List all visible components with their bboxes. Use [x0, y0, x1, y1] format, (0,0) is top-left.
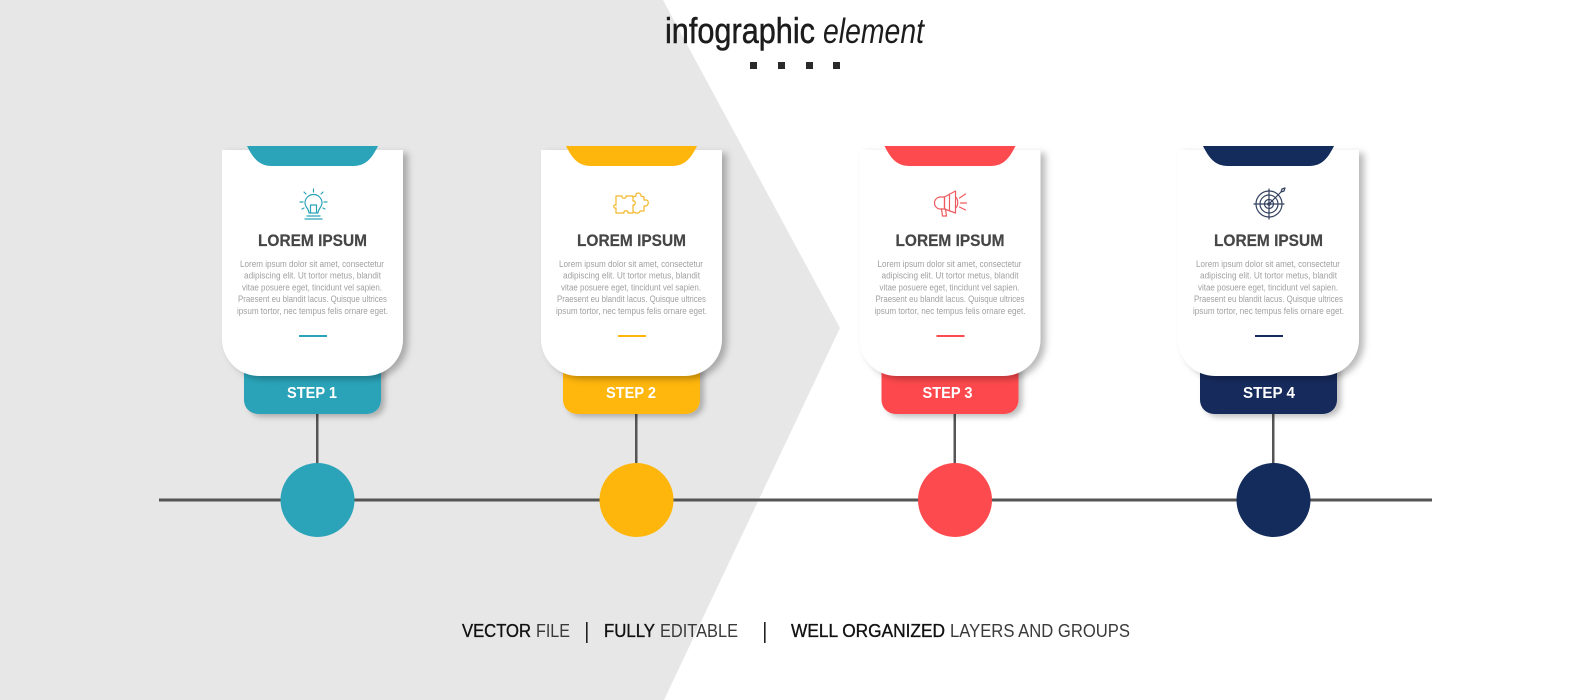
- heading 1: LOREM IPSUM: [258, 232, 367, 250]
- step 3 unit: [860, 146, 1040, 537]
- body text 4: [1193, 259, 1344, 316]
- body text 1: [237, 259, 388, 316]
- timeline node 3: [918, 463, 992, 537]
- connector 1: [316, 410, 318, 464]
- body text 1: adipiscing elit. Ut tortor metus, blandit: [244, 270, 381, 280]
- heading 4: LOREM IPSUM: [1214, 232, 1323, 250]
- card 3 top tab: [884, 146, 1016, 166]
- body text 4: vitae posuere eget, tincidunt vel sapien.: [1198, 282, 1338, 292]
- card 1 top tab: [247, 146, 378, 166]
- heading 3: LOREM IPSUM: [896, 232, 1004, 250]
- footer tagline: EDITABLE: [660, 621, 738, 641]
- card 4: [1178, 150, 1359, 376]
- step 4 unit: [1178, 146, 1359, 537]
- body text 3: ipsum tortor, nec tempus felis ornare eget.: [874, 306, 1026, 316]
- connector 2: [635, 410, 638, 464]
- footer tagline: FULLY: [604, 621, 655, 641]
- body text 3: Praesent eu blandit lacus. Quisque ultrices: [876, 294, 1025, 304]
- accent dash 2: [618, 335, 646, 337]
- body text 3: [874, 259, 1026, 316]
- timeline line: [159, 498, 1432, 502]
- step 1 label tab: [244, 365, 381, 414]
- heading 2: LOREM IPSUM: [577, 232, 686, 250]
- connector 4: [1272, 410, 1274, 464]
- body text 2: [556, 259, 707, 316]
- icon: puzzle: [614, 193, 648, 213]
- footer tagline: VECTOR: [462, 621, 531, 641]
- card 1: [222, 150, 403, 376]
- body text 3: adipiscing elit. Ut tortor metus, blandit: [882, 270, 1019, 280]
- body text 4: Praesent eu blandit lacus. Quisque ultrices: [1194, 294, 1343, 304]
- body text 4: Lorem ipsum dolor sit amet, consectetur: [1196, 259, 1340, 269]
- connector 3: [954, 410, 956, 464]
- footer tagline: [462, 621, 1130, 643]
- footer tagline: WELL ORGANIZED: [791, 621, 945, 641]
- title: [665, 10, 925, 51]
- step 4 label tab: [1200, 365, 1337, 414]
- card 2: [541, 150, 722, 376]
- icon: megaphone: [934, 191, 966, 216]
- card 2 top tab: [566, 146, 697, 166]
- body text 2: adipiscing elit. Ut tortor metus, blandit: [563, 270, 700, 280]
- body text 1: vitae posuere eget, tincidunt vel sapien.: [242, 282, 382, 292]
- body text 2: vitae posuere eget, tincidunt vel sapien.: [561, 282, 701, 292]
- body text 4: ipsum tortor, nec tempus felis ornare eget.: [1193, 306, 1344, 316]
- accent dash 1: [299, 335, 327, 337]
- body text 2: Praesent eu blandit lacus. Quisque ultrices: [557, 294, 706, 304]
- step 3 label tab: STEP 3: [922, 385, 973, 402]
- footer tagline: LAYERS AND GROUPS: [950, 621, 1130, 641]
- card 3: [860, 150, 1040, 376]
- step 2 label tab: [563, 365, 700, 414]
- body text 2: ipsum tortor, nec tempus felis ornare eget.: [556, 306, 707, 316]
- body text 1: Praesent eu blandit lacus. Quisque ultrices: [238, 294, 387, 304]
- accent dash 4: [1255, 335, 1283, 337]
- step 1 unit: [222, 146, 403, 537]
- step 4 label tab: STEP 4: [1243, 385, 1295, 402]
- timeline node 2: [600, 463, 674, 537]
- body text 1: ipsum tortor, nec tempus felis ornare eget.: [237, 306, 388, 316]
- title: infographic: [665, 10, 815, 51]
- step 2 unit: [541, 146, 722, 537]
- body text 2: Lorem ipsum dolor sit amet, consectetur: [559, 259, 703, 269]
- body text 4: adipiscing elit. Ut tortor metus, blandit: [1200, 270, 1337, 280]
- background arrow shape: [0, 0, 840, 700]
- accent dash 3: [936, 335, 964, 337]
- icon: light bulb: [300, 189, 327, 219]
- step 2 label tab: STEP 2: [606, 385, 656, 402]
- body text 3: Lorem ipsum dolor sit amet, consectetur: [878, 259, 1022, 269]
- footer tagline: FILE: [536, 621, 570, 641]
- icon: target: [1254, 188, 1285, 219]
- body text 3: vitae posuere eget, tincidunt vel sapien.: [880, 282, 1020, 292]
- step 3 label tab: [882, 365, 1018, 414]
- step 1 label tab: STEP 1: [287, 385, 337, 402]
- timeline node 4: [1236, 463, 1310, 537]
- title: element: [823, 12, 925, 51]
- card 4 top tab: [1203, 146, 1334, 166]
- timeline node 1: [280, 463, 354, 537]
- title dots: [750, 62, 840, 69]
- body text 1: Lorem ipsum dolor sit amet, consectetur: [240, 259, 384, 269]
